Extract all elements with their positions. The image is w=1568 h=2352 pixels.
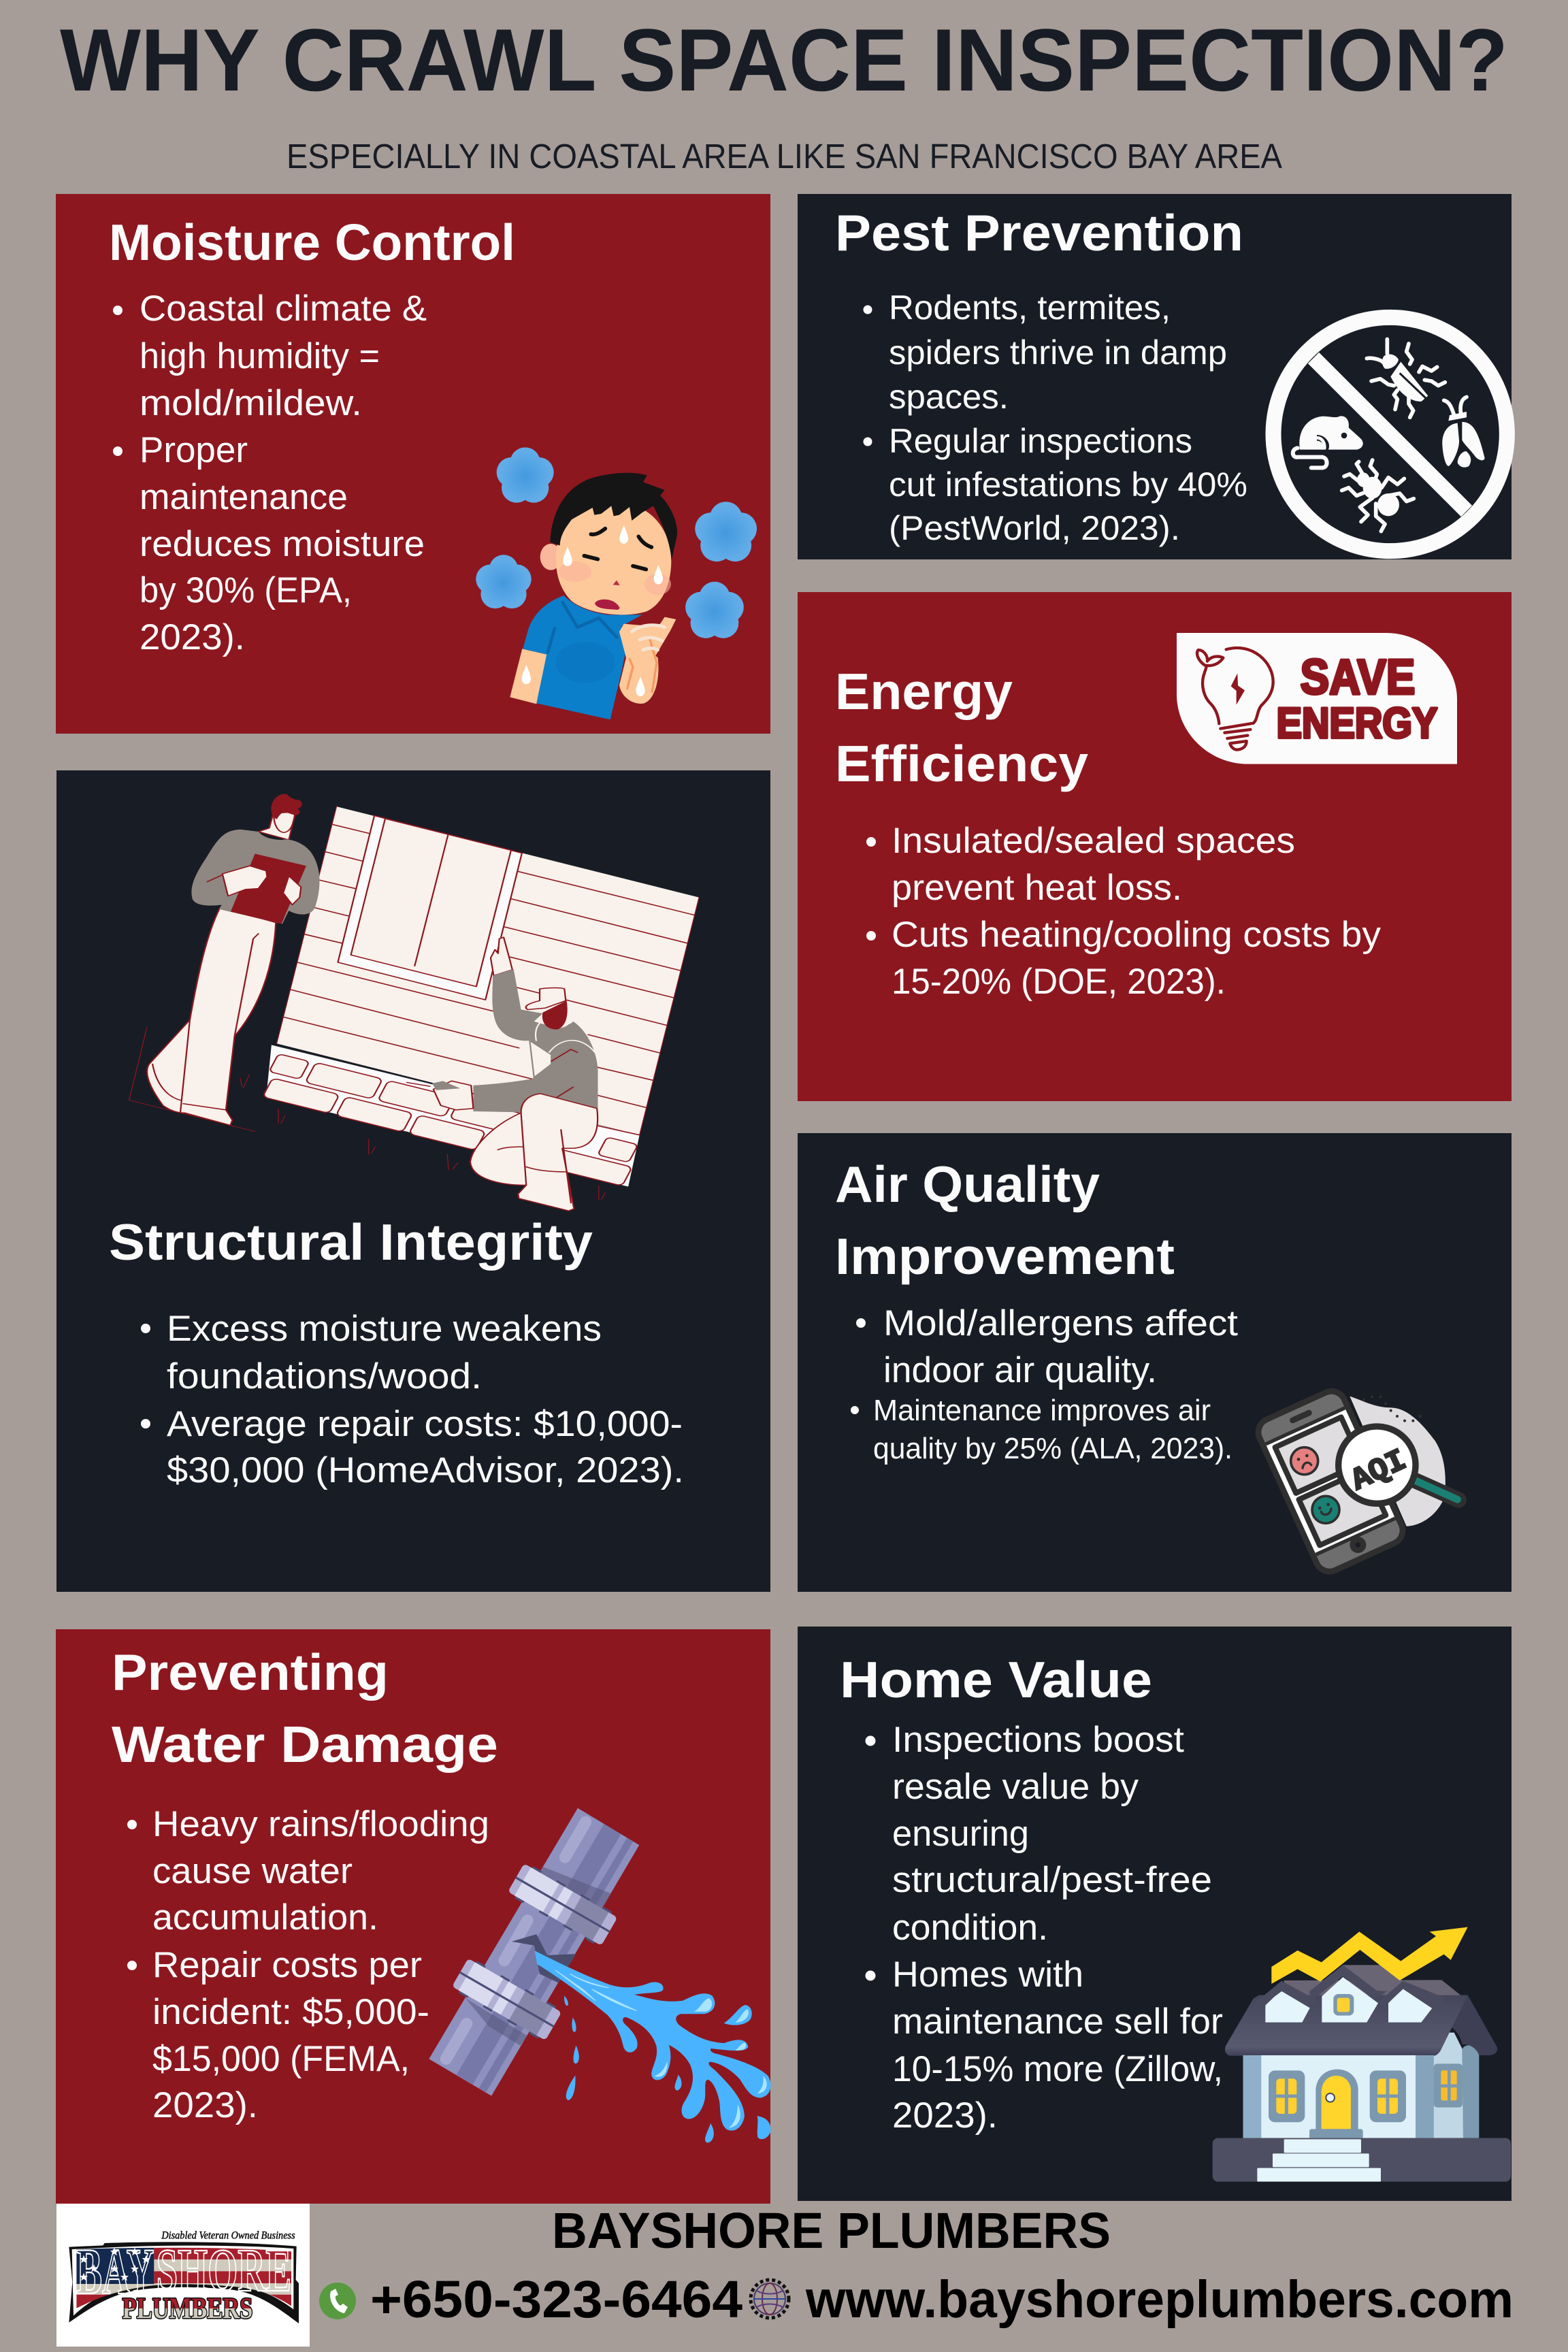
text block: home value bullets: maintenance sell for	[892, 2002, 1223, 2042]
text block: moisture bullets: by 30% (EPA,	[140, 570, 352, 610]
heading: air quality improvement	[835, 1156, 1175, 1285]
text block: structural bullets	[141, 1309, 684, 1490]
logo: Bayshore Plumbers: SHORE	[157, 2237, 291, 2304]
text block: home value bullets: condition.	[892, 1908, 1048, 1948]
text block: pest bullets	[863, 289, 1247, 547]
icon: house with rising arrow	[1213, 1927, 1511, 2182]
text block: structural bullets: foundations/wood.	[167, 1356, 482, 1396]
text block: structural bullets: Average repair costs: $10,000-	[167, 1404, 683, 1444]
text block: energy bullets: prevent heat loss.	[892, 868, 1182, 908]
icon: save energy badge	[1177, 633, 1457, 764]
panel: structural integrity	[56, 770, 770, 1592]
text block: energy bullets: 15-20% (DOE, 2023).	[892, 962, 1226, 1002]
heading: moisture control: Moisture Control	[109, 214, 515, 271]
text block: water damage bullets: accumulation.	[152, 1897, 378, 1938]
icon: sweating boy with humidity clouds	[476, 447, 757, 719]
text block: pest bullets: Regular inspections	[889, 422, 1192, 460]
title: WHY CRAWL SPACE INSPECTION?	[60, 10, 1508, 110]
text block: air quality bullets: Maintenance improves air	[873, 1394, 1211, 1427]
icon: save energy badge: ENERGY	[1277, 700, 1437, 747]
text block: structural bullets: $30,000 (HomeAdvisor, 2023).	[167, 1450, 684, 1490]
text block: energy bullets: Cuts heating/cooling costs by	[892, 915, 1382, 955]
text block: water damage bullets: 2023).	[152, 2085, 258, 2125]
text block: pest bullets: spaces.	[889, 378, 1009, 416]
text block: air quality bullets: quality by 25% (ALA, 2023).	[873, 1432, 1232, 1465]
heading: home value: Home Value	[840, 1651, 1152, 1708]
text block: pest bullets: (PestWorld, 2023).	[889, 509, 1180, 547]
icon: AQI phone and magnifier: AQI	[1346, 1443, 1412, 1499]
panel: moisture control	[56, 194, 770, 734]
text block: moisture bullets: mold/mildew.	[140, 383, 362, 423]
heading: air quality improvement: Improvement	[835, 1228, 1175, 1285]
text block: home value bullets: 10-15% more (Zillow,	[892, 2049, 1223, 2089]
text block: home value bullets: ensuring	[892, 1814, 1029, 1854]
text block: water damage bullets: Heavy rains/flooding	[152, 1804, 489, 1844]
heading: structural integrity: Structural Integrity	[109, 1213, 593, 1271]
icon: save energy badge: SAVE	[1301, 650, 1415, 704]
text block: energy bullets	[866, 821, 1382, 1002]
logo: Bayshore Plumbers: Disabled Veteran Owned Business	[161, 2230, 295, 2241]
text block: water damage bullets	[127, 1804, 489, 2125]
icon: globe	[751, 2280, 789, 2318]
icon: burst pipe with water	[429, 1808, 771, 2143]
text block: home value bullets: Inspections boost	[892, 1720, 1184, 1760]
text block: home value bullets: 2023).	[892, 2095, 998, 2136]
text block: air quality bullets: indoor air quality.	[883, 1350, 1157, 1390]
footer: website: www.bayshoreplumbers.com	[805, 2270, 1514, 2329]
heading: energy efficiency: Efficiency	[835, 735, 1088, 792]
text block: home value bullets: Homes with	[892, 1955, 1083, 1995]
panel: preventing water damage	[56, 1629, 771, 2204]
logo: Bayshore Plumbers: BAY	[76, 2235, 154, 2308]
subtitle: ESPECIALLY IN COASTAL AREA LIKE SAN FRANCISCO BAY AREA	[287, 137, 1282, 176]
text block: air quality bullets: Mold/allergens affect	[883, 1303, 1238, 1343]
illustration: inspectors at house wall	[129, 794, 699, 1211]
text block: moisture bullets: high humidity =	[140, 336, 380, 376]
logo: Bayshore Plumbers: PLUMBERS	[122, 2292, 252, 2325]
text block: home value bullets	[866, 1720, 1223, 2136]
text block: moisture bullets: 2023).	[140, 617, 245, 657]
heading: preventing water damage: Water Damage	[112, 1716, 498, 1773]
heading: energy efficiency: Energy	[835, 663, 1013, 720]
man one	[147, 907, 276, 1125]
icon: phone	[319, 2283, 356, 2319]
man two	[491, 937, 512, 976]
heading: preventing water damage: Preventing	[112, 1644, 389, 1701]
text block: home value bullets: resale value by	[892, 1767, 1139, 1807]
text block: home value bullets: structural/pest-free	[892, 1860, 1212, 1900]
text block: energy bullets: Insulated/sealed spaces	[892, 821, 1295, 861]
text block: water damage bullets: cause water	[152, 1851, 353, 1891]
text block: air quality bullets	[851, 1303, 1238, 1465]
text block: moisture bullets: maintenance	[140, 477, 348, 517]
footer: phone number: +650-323-6464	[370, 2270, 742, 2329]
panel: air quality improvement	[798, 1133, 1512, 1592]
text block: structural bullets: Excess moisture weakens	[167, 1309, 602, 1349]
text block: moisture bullets: Proper	[140, 430, 248, 470]
icon: AQI phone and magnifier	[1254, 1387, 1458, 1576]
panel: energy efficiency	[798, 592, 1512, 1101]
heading: pest prevention: Pest Prevention	[835, 204, 1243, 261]
text block: water damage bullets: Repair costs per	[152, 1945, 422, 1985]
text block: moisture bullets	[113, 289, 427, 657]
heading: energy efficiency	[835, 663, 1088, 792]
heading: air quality improvement: Air Quality	[835, 1156, 1100, 1213]
text block: pest bullets: spiders thrive in damp	[889, 333, 1227, 372]
logo: Bayshore Plumbers	[56, 2204, 310, 2347]
panel: home value	[798, 1627, 1512, 2201]
icon: no pests sign	[1273, 317, 1507, 551]
footer: company name: BAYSHORE PLUMBERS	[552, 2202, 1111, 2259]
text block: moisture bullets: reduces moisture	[140, 524, 425, 564]
text block: water damage bullets: incident: $5,000-	[152, 1992, 429, 2032]
text block: water damage bullets: $15,000 (FEMA,	[152, 2039, 410, 2079]
panel: pest prevention	[798, 194, 1512, 559]
text block: pest bullets: Rodents, termites,	[889, 289, 1171, 327]
text block: moisture bullets: Coastal climate &	[140, 289, 427, 329]
heading: preventing water damage	[112, 1644, 498, 1773]
text block: pest bullets: cut infestations by 40%	[889, 466, 1247, 504]
